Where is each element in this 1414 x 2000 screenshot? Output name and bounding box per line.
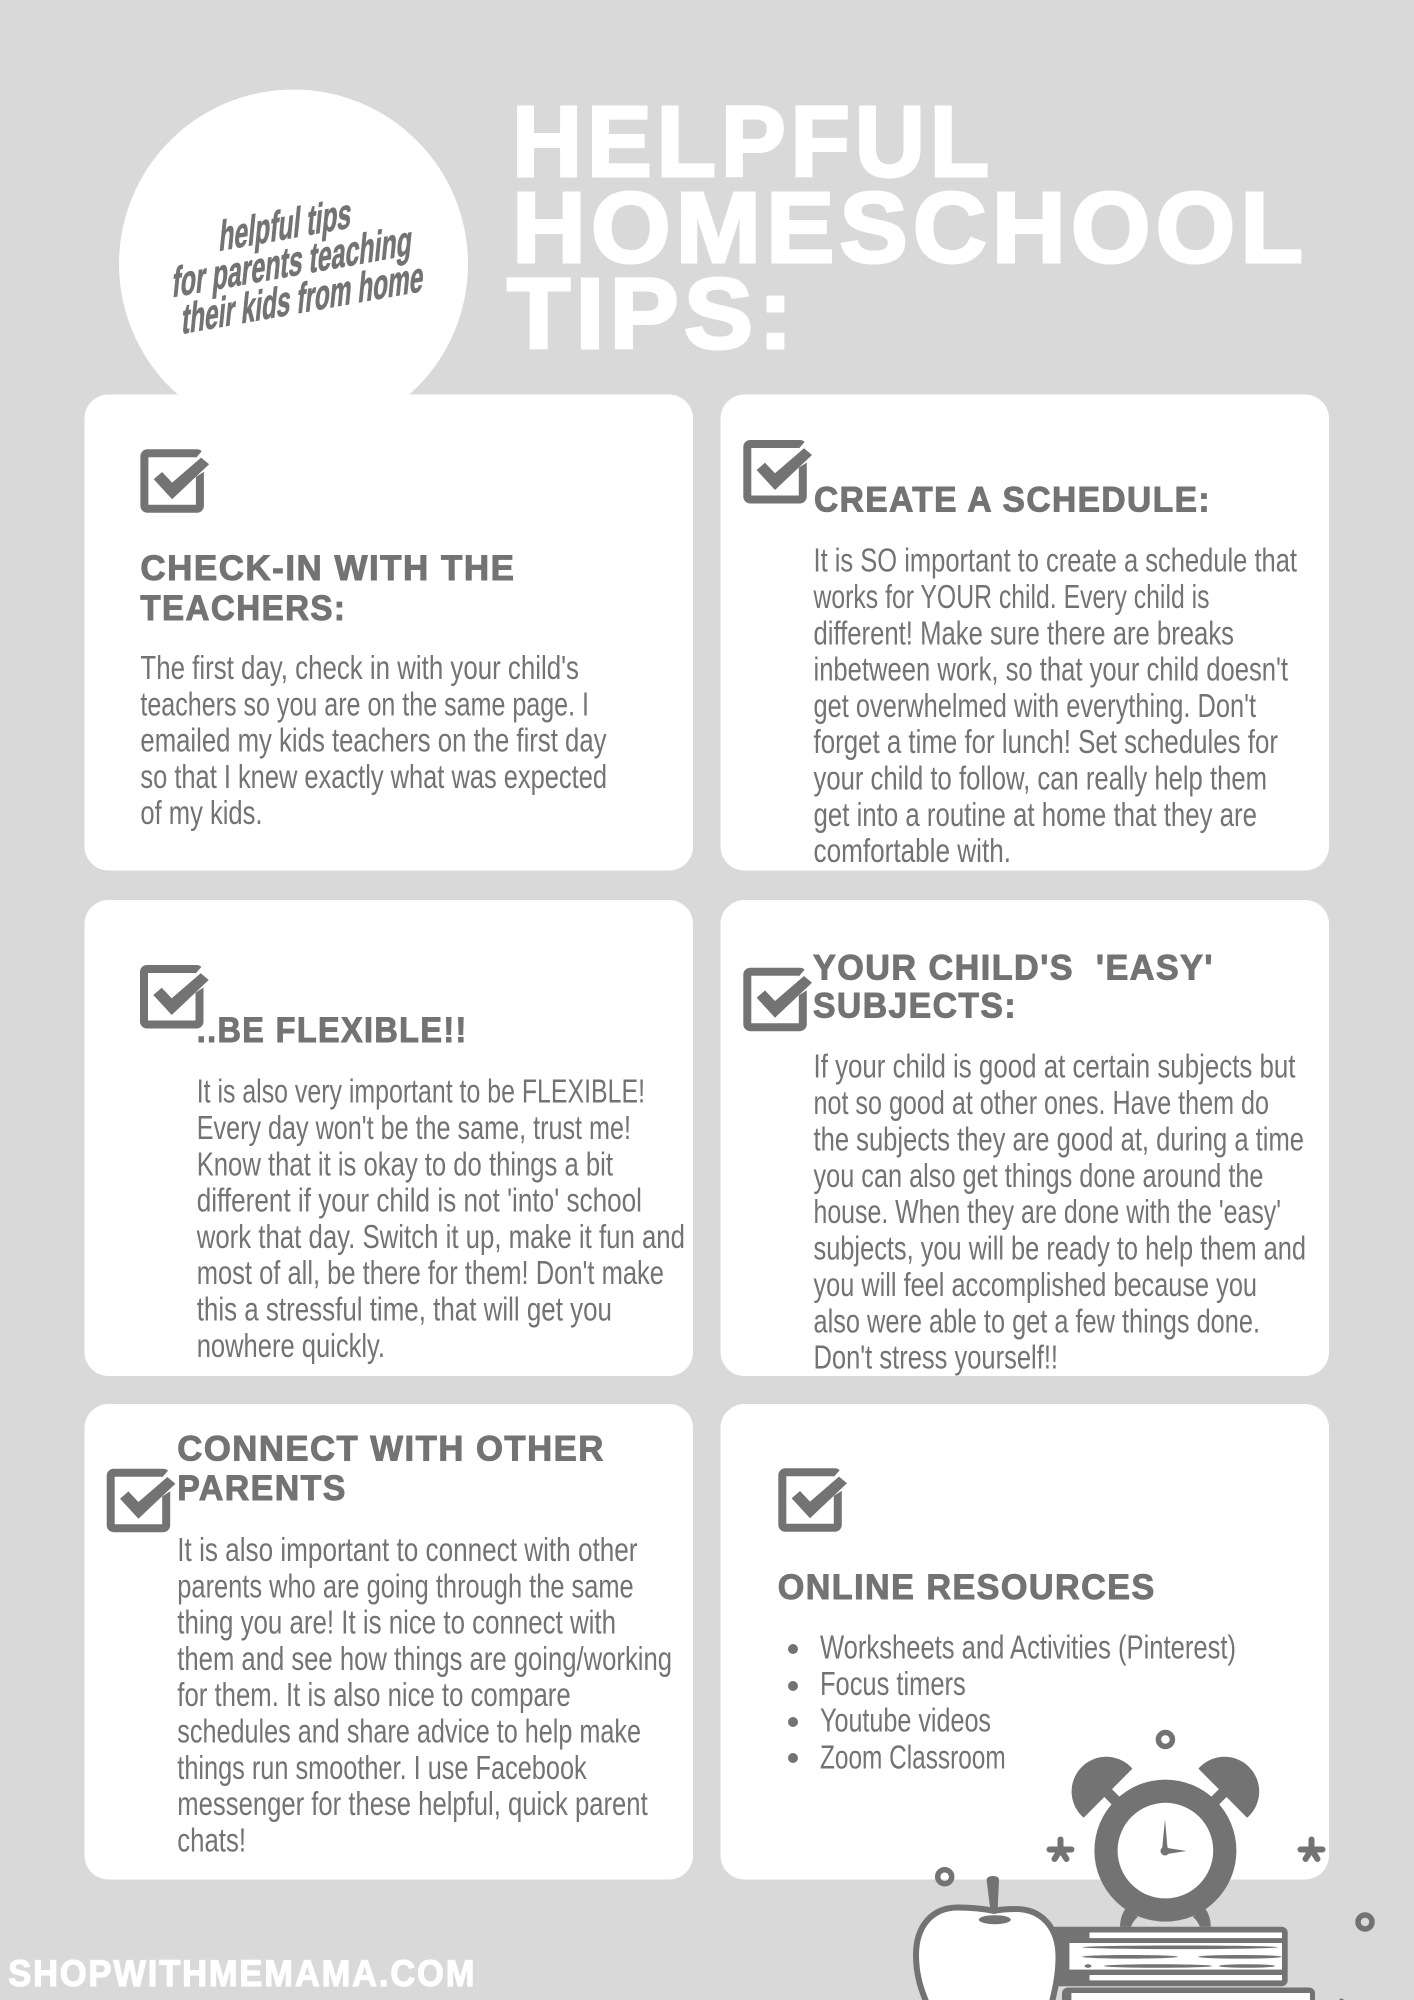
footer website: SHOPWITHMEMAMA.COM	[8, 1953, 476, 1994]
body text: Know that it is okay to do things a bit	[197, 1145, 613, 1182]
body text: It is also important to connect with other	[177, 1531, 638, 1568]
bullet list: Worksheets and Activities (Pinterest)	[820, 1628, 1236, 1665]
body text: Don't stress yourself!!	[814, 1339, 1058, 1376]
body text: comfortable with.	[814, 832, 1011, 869]
illustration: alarm clock	[1072, 1757, 1259, 1927]
panel: connect with other parents	[84, 1404, 693, 1880]
tagline	[171, 190, 426, 344]
body text: teachers so you are on the same page. I	[140, 685, 589, 722]
heading: CHECK-IN WITH THE	[140, 549, 515, 588]
body text	[140, 649, 607, 831]
body text: your child to follow, can really help them	[814, 760, 1267, 796]
heading: CREATE A SCHEDULE:	[814, 481, 1211, 520]
body text: different! Make sure there are breaks	[814, 614, 1234, 651]
heading	[177, 1430, 605, 1508]
illustration: books	[1050, 1927, 1344, 2000]
body text: you will feel accomplished because you	[814, 1266, 1257, 1303]
icon: checkbox	[747, 968, 815, 1027]
body text: messenger for these helpful, quick parent	[177, 1785, 648, 1822]
icon: checkbox	[144, 965, 212, 1024]
tagline: for parents teaching	[171, 217, 415, 307]
body text: emailed my kids teachers on the first day	[140, 722, 607, 758]
decorative asterisks	[1050, 1840, 1322, 1859]
body text: It is also very important to be FLEXIBLE!	[197, 1073, 645, 1110]
body text: get overwhelmed with everything. Don't	[814, 687, 1256, 724]
tagline: helpful tips	[217, 190, 354, 261]
body text	[813, 542, 1297, 869]
body text: work that day. Switch it up, make it fun and	[196, 1218, 685, 1255]
body text: of my kids.	[140, 794, 262, 831]
body text: you can also get things done around the	[814, 1157, 1264, 1194]
body text: nowhere quickly.	[197, 1327, 385, 1364]
bullet list: Focus timers	[820, 1665, 966, 1702]
heading: CONNECT WITH OTHER	[177, 1430, 605, 1469]
panel: online resources	[720, 1404, 1329, 1880]
panel: check-in with the teachers	[84, 394, 693, 870]
heading	[140, 549, 515, 628]
icon: checkbox	[747, 440, 815, 500]
bullet list: Zoom Classroom	[820, 1738, 1006, 1775]
heading: ..BE FLEXIBLE!!	[197, 1011, 468, 1050]
icon: checkbox	[782, 1468, 850, 1528]
body text	[177, 1531, 672, 1858]
decorative rings	[938, 1732, 1372, 1929]
body text	[814, 1048, 1306, 1376]
icon: checkbox	[144, 449, 212, 509]
badge circle with tagline	[119, 90, 468, 438]
title	[507, 86, 1308, 370]
title: HELPFUL	[512, 86, 994, 198]
body text: so that I knew exactly what was expected	[140, 758, 607, 795]
body text: The first day, check in with your child's	[140, 649, 579, 686]
body text: If your child is good at certain subjects but	[814, 1048, 1296, 1085]
heading: YOUR CHILD'S 'EASY'	[813, 948, 1214, 987]
body text: works for YOUR child. Every child is	[813, 578, 1210, 615]
bullet list: Youtube videos	[820, 1702, 991, 1739]
body text: thing you are! It is nice to connect with	[177, 1604, 616, 1641]
heading	[813, 948, 1214, 1026]
body text: this a stressful time, that will get you	[197, 1290, 612, 1328]
body text: also were able to get a few things done.	[814, 1302, 1260, 1339]
heading: PARENTS	[177, 1469, 347, 1508]
tagline: their kids from home	[180, 253, 426, 344]
body text: most of all, be there for them! Don't make	[197, 1254, 664, 1291]
body text: them and see how things are going/working	[177, 1640, 672, 1677]
heading: TEACHERS:	[140, 589, 346, 628]
title: HOMESCHOOL	[512, 172, 1308, 284]
panel: your child's easy subjects	[720, 900, 1329, 1376]
body text: get into a routine at home that they are	[814, 796, 1257, 833]
body text: for them. It is also nice to compare	[177, 1676, 571, 1713]
body text: forget a time for lunch! Set schedules for	[814, 723, 1278, 760]
heading: SUBJECTS:	[813, 987, 1017, 1026]
body text: things run smoother. I use Facebook	[177, 1749, 587, 1786]
body text: not so good at other ones. Have them do	[814, 1084, 1269, 1121]
body text: inbetween work, so that your child doesn't	[814, 651, 1288, 688]
body text: Every day won't be the same, trust me!	[197, 1109, 631, 1146]
title: TIPS:	[507, 258, 798, 370]
illustration: apple	[916, 1876, 1058, 2000]
heading: ONLINE RESOURCES	[778, 1568, 1156, 1607]
body text	[196, 1073, 685, 1364]
panel: create a schedule	[720, 394, 1329, 870]
body text: chats!	[177, 1821, 246, 1858]
body text: parents who are going through the same	[177, 1567, 634, 1604]
body text: schedules and share advice to help make	[177, 1712, 641, 1750]
bullet list	[788, 1628, 1236, 1775]
panel: be flexible	[84, 900, 693, 1376]
icon: checkbox	[111, 1469, 179, 1528]
body text: different if your child is not 'into' school	[197, 1182, 642, 1219]
